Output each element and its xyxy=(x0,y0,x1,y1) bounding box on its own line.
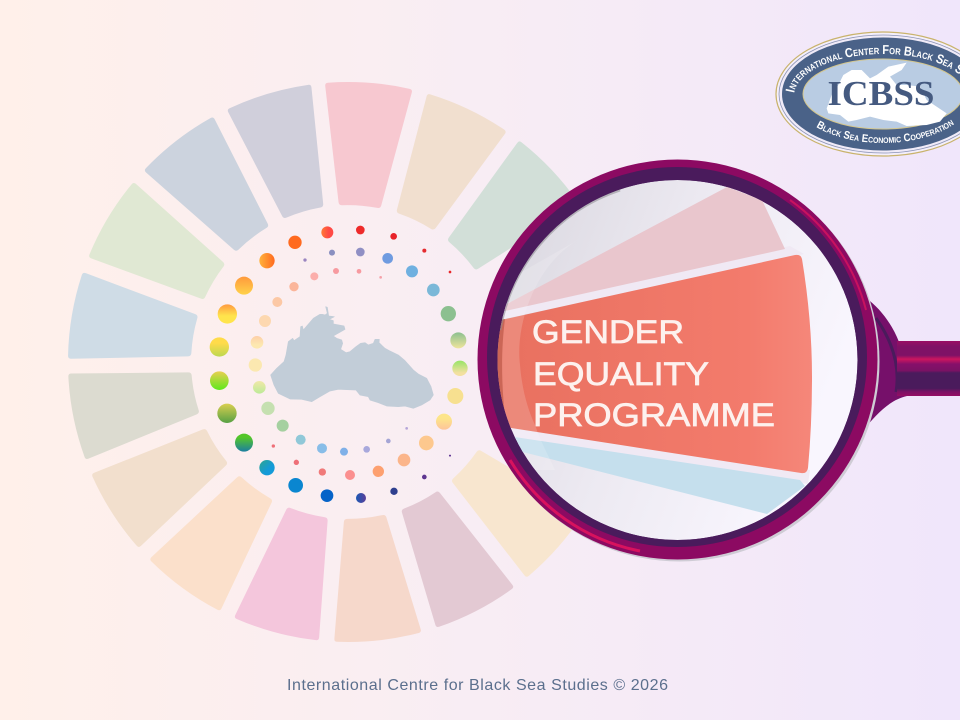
wheel segment: blue xyxy=(65,272,202,379)
title line: GENDER: GENDER xyxy=(532,314,684,350)
ICBSS logo xyxy=(775,31,960,157)
logo bottom text: Black Sea Economic Cooperation xyxy=(816,120,954,143)
magnifier handle xyxy=(860,298,960,434)
logo map xyxy=(827,63,947,126)
lens rim xyxy=(478,160,878,560)
rim shadow on coral xyxy=(498,319,505,408)
logo wordmark: ICBSS xyxy=(828,74,934,113)
outer dot ring xyxy=(210,226,451,503)
magnified light gaps xyxy=(502,286,810,484)
lens shadow xyxy=(480,162,880,562)
wheel segment: olive xyxy=(65,350,204,460)
wheel segment: red xyxy=(316,80,412,210)
wheel segment: light green xyxy=(86,180,237,319)
wheel centre dots xyxy=(210,226,468,503)
footer credit: International Centre for Black Sea Studies © 2026 xyxy=(287,677,668,694)
icon: Black Sea map xyxy=(271,307,433,408)
middle dot ring xyxy=(272,248,468,480)
wheel segment: peach xyxy=(322,512,421,645)
SDG wheel xyxy=(65,80,587,645)
wheel segment: plum xyxy=(381,480,515,631)
inner dot ring xyxy=(249,268,408,456)
wheel segment: blue grey xyxy=(142,114,287,265)
title line: PROGRAMME: PROGRAMME xyxy=(533,397,775,433)
glass crescent reflection xyxy=(498,274,549,470)
wheel segment: pink xyxy=(234,501,350,644)
wheel segment: sand xyxy=(89,409,240,550)
wheel segment: grey mauve xyxy=(226,81,345,225)
magnified wedge: blue xyxy=(495,434,805,514)
wheel segment: green xyxy=(432,138,582,287)
magnified wedge: pale red xyxy=(505,187,785,311)
magnified wedge: gender equality xyxy=(492,255,812,473)
lens glass xyxy=(490,180,858,540)
title line: EQUALITY: EQUALITY xyxy=(533,356,709,392)
wheel segment: light orange xyxy=(148,462,291,614)
magnifying glass xyxy=(478,160,960,562)
wheel segment: yellow xyxy=(436,432,587,580)
programme title xyxy=(532,314,775,433)
inner rim shadow xyxy=(500,190,620,330)
wheel segment: tan xyxy=(376,91,508,240)
